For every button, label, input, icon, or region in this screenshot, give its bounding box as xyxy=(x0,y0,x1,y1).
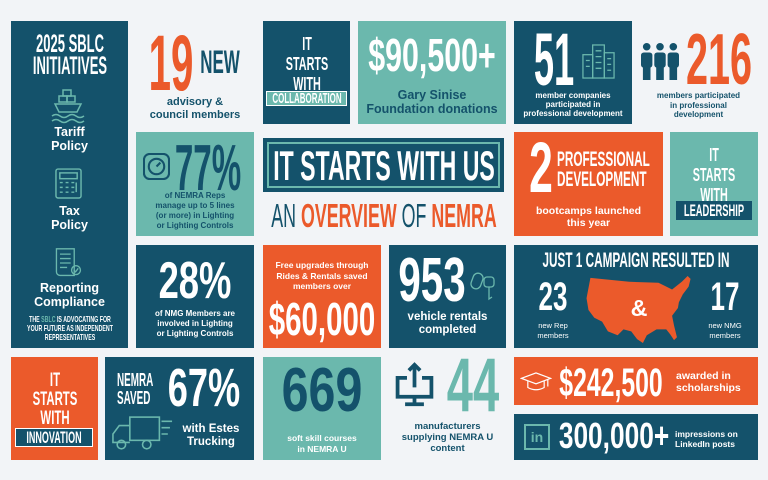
panel: it starts with leadership: IT xyxy=(709,145,719,165)
icon: ship xyxy=(52,89,84,124)
panel: it starts with collaboration: IT xyxy=(302,34,311,54)
text: tariff policy xyxy=(51,125,88,153)
panel: 2 professional development bootcamps xyxy=(514,132,663,236)
icon: US map: & xyxy=(631,295,648,321)
panel: it starts with collaboration: WITH xyxy=(293,74,320,94)
panel: 669 soft skill courses: 669 xyxy=(282,356,362,425)
panel: 300,000+ LinkedIn impressions: impressions on xyxy=(675,429,738,439)
stat: 19 new advisory members: 19 xyxy=(148,18,193,107)
panel: $242,500 scholarships: scholarships xyxy=(676,382,741,394)
label: innovation: INNOVATION xyxy=(26,428,82,447)
stat: 44 manufacturers: content xyxy=(430,443,465,454)
text: SBLC advocacy note: THE SBLC IS ADVOCATING FOR xyxy=(29,314,110,324)
panel: it starts with innovation: WITH xyxy=(40,408,69,429)
panel: $60,000 rides & rentals: members over xyxy=(293,281,351,291)
panel: 28% NMG members: 28% xyxy=(159,252,231,310)
panel: 77% NEMRA reps: manage up to 5 lines xyxy=(155,201,235,210)
label: collaboration: COLLABORATION xyxy=(272,90,341,107)
panel: 51 member companies xyxy=(514,21,632,124)
heading: 2025 SBLC initiatives: INITIATIVES xyxy=(32,52,107,80)
panel: 2 professional development bootcamps: bootcamps launched xyxy=(536,205,641,217)
stat: 19 new advisory members: advisory & xyxy=(167,96,223,108)
stat: 23 new rep members xyxy=(537,275,569,340)
stat: 23 new rep members: new Rep xyxy=(538,321,568,330)
stat: 19 new advisory members xyxy=(148,18,240,120)
stat: 216 members: 216 xyxy=(686,20,752,100)
panel: 51 member companies: participated in xyxy=(546,100,600,109)
icon: US map xyxy=(586,276,690,343)
stat: 23 new rep members: 23 xyxy=(539,275,567,319)
panel: 300,000+ LinkedIn impressions xyxy=(514,414,758,460)
panel: 67% saved with Estes: with Estes xyxy=(183,423,239,435)
panel: it starts with innovation: STARTS xyxy=(32,389,77,410)
text: SBLC advocacy note xyxy=(27,314,113,342)
panel: it starts with leadership: STARTS xyxy=(693,165,735,185)
panel: 669 soft skill courses: in NEMRA U xyxy=(297,444,347,454)
stat: 17 new NMG members: new NMG xyxy=(708,321,742,330)
panel: 67% saved with Estes: Trucking xyxy=(187,436,235,448)
stat: 17 new NMG members xyxy=(708,275,742,340)
stat: 44 manufacturers: supplying NEMRA U xyxy=(402,432,493,443)
panel: 28% NMG members: of NMG Members are xyxy=(155,309,235,318)
panel: $60,000 rides & rentals: $60,000 xyxy=(269,293,375,345)
stat: 23 new rep members: members xyxy=(537,330,569,340)
panel: 953 vehicle rentals xyxy=(389,245,506,348)
panel: 77% NEMRA reps: or Lighting Controls xyxy=(157,221,233,230)
panel: $242,500 scholarships: awarded in xyxy=(676,370,731,382)
panel: 67% saved with Estes xyxy=(105,357,254,460)
icon: calculator xyxy=(55,168,82,199)
panel: 77% NEMRA reps xyxy=(136,132,254,236)
stat: 44 manufacturers xyxy=(396,343,499,454)
panel: 953 vehicle rentals: completed xyxy=(419,324,476,336)
text: tariff policy: Tariff xyxy=(54,125,85,139)
panel: 77% NEMRA reps: (or more) in Lighting xyxy=(156,211,234,220)
text: reporting compliance: Reporting xyxy=(40,281,99,295)
text: tax policy: Tax xyxy=(59,204,80,218)
panel: $60,000 rides & rentals: Free upgrades through xyxy=(275,260,369,270)
stat: 44 manufacturers: 44 xyxy=(447,343,499,428)
text: tax policy xyxy=(51,204,88,232)
panel: $60,000 rides & rentals: Rides & Rentals saved xyxy=(276,270,368,280)
panel: 2 professional development bootcamps: this year xyxy=(567,217,610,229)
icon: truck xyxy=(112,416,172,450)
panel: 300,000+ LinkedIn impressions: LinkedIn posts xyxy=(675,439,735,449)
icon: gauge xyxy=(143,153,170,180)
panel: $60,000 rides & rentals xyxy=(263,245,381,348)
panel: 2 professional development bootcamps: DEVELOPMENT xyxy=(557,168,647,191)
panel: 28% NMG members: involved in Lighting xyxy=(157,319,233,328)
panel: 67% saved with Estes: 67% xyxy=(168,358,240,418)
text: reporting compliance: Compliance xyxy=(34,295,105,309)
heading: 2025 SBLC initiatives xyxy=(32,30,107,80)
panel: 77% NEMRA reps: of NEMRA Reps xyxy=(165,191,225,200)
text: SBLC advocacy note: YOUR FUTURE AS INDEPENDENT xyxy=(27,323,112,333)
panel: $90,500+ donations: Gary Sinise xyxy=(398,88,466,102)
label: leadership: LEADERSHIP xyxy=(684,201,744,220)
stat: 44 manufacturers: manufacturers xyxy=(414,421,480,432)
panel: 67% saved with Estes: NEMRA xyxy=(117,370,153,390)
panel: 669 soft skill courses: soft skill courses xyxy=(287,433,357,443)
stat: 216 members: members participated xyxy=(657,91,740,100)
icon: buildings xyxy=(582,44,615,79)
panel: 51 member companies: professional development xyxy=(523,109,623,118)
panel: 669 soft skill courses xyxy=(263,357,381,460)
subtitle: an overview of NEMRA: AN OVERVIEW OF NEMRA xyxy=(271,197,496,234)
panel: 2 professional development bootcamps: PROFESSIONAL xyxy=(557,148,650,171)
panel: it starts with innovation: IT xyxy=(49,370,60,391)
panel: it starts with leadership: WITH xyxy=(700,185,728,205)
panel: campaign results: JUST 1 CAMPAIGN RESULTED IN xyxy=(542,249,730,272)
icon: graduation cap xyxy=(520,372,552,390)
icon: linkedin: in xyxy=(531,429,543,445)
panel: $90,500+ donations: $90,500+ xyxy=(368,29,496,81)
panel: 28% NMG members: or Lighting Controls xyxy=(157,329,233,338)
icon: document xyxy=(56,248,82,276)
panel: 77% NEMRA reps: 77% xyxy=(175,131,241,204)
panel: 28% NMG members xyxy=(136,245,254,348)
stat: 19 new advisory members: NEW xyxy=(200,44,240,80)
panel: $90,500+ donations: Foundation donations xyxy=(366,102,498,116)
panel: $242,500 scholarships xyxy=(514,357,758,405)
panel: it starts with innovation xyxy=(11,357,98,460)
panel: 953 vehicle rentals: vehicle rentals xyxy=(408,311,487,323)
stat: 216 members: development xyxy=(674,110,723,119)
icon: linkedin xyxy=(524,424,550,450)
icon: people xyxy=(641,43,679,80)
panel: $242,500 scholarships: $242,500 xyxy=(559,361,663,405)
stat: 19 new advisory members: council members xyxy=(150,108,240,120)
panel: $90,500+ donations xyxy=(358,21,506,124)
panel: 51 member companies: member companies xyxy=(535,91,611,100)
text: tax policy: Policy xyxy=(51,218,88,232)
icon: upload monitor xyxy=(396,362,434,406)
heading: 2025 SBLC initiatives: 2025 SBLC xyxy=(36,30,103,58)
panel: campaign results xyxy=(514,245,758,348)
panel: 2 professional development bootcamps: 2 xyxy=(529,129,553,208)
text: SBLC advocacy note: REPRESENTATIVES xyxy=(44,332,95,342)
text: reporting compliance xyxy=(34,281,105,309)
panel: it starts with collaboration: STARTS xyxy=(285,54,328,74)
icon: car keys xyxy=(470,272,495,300)
title: it starts with us: IT STARTS WITH US xyxy=(273,142,494,189)
stat: 216 members xyxy=(641,20,752,119)
panel: 953 vehicle rentals: 953 xyxy=(398,246,465,315)
panel: 51 member companies: 51 xyxy=(534,18,574,101)
panel: it starts with leadership xyxy=(670,132,758,236)
text: tariff policy: Policy xyxy=(51,139,88,153)
panel: it starts with collaboration xyxy=(263,21,350,124)
stat: 17 new NMG members: 17 xyxy=(711,275,739,319)
panel: 67% saved with Estes: SAVED xyxy=(117,388,150,408)
panel: 2025 SBLC initiatives xyxy=(11,21,128,348)
stat: 17 new NMG members: members xyxy=(709,330,741,340)
stat: 216 members: in professional xyxy=(670,100,727,110)
panel: 300,000+ LinkedIn impressions: 300,000+ xyxy=(559,415,669,456)
